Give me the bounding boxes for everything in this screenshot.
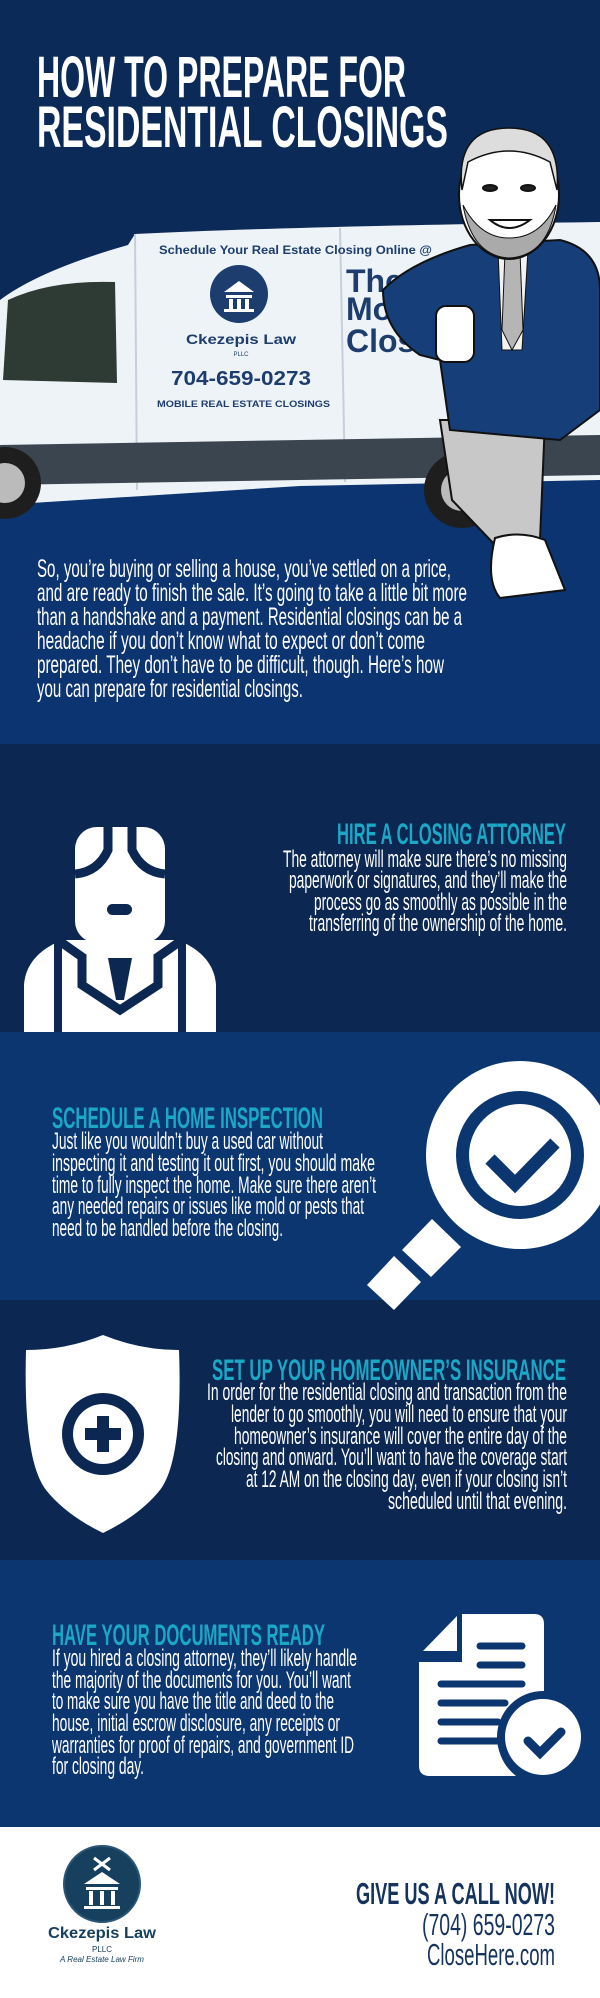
- intro text: [37, 555, 467, 703]
- call to action: [356, 1876, 555, 1972]
- text: inspecting it and testing it out first, you should make: [52, 1150, 375, 1177]
- illustration: cartoon attorney: [383, 128, 600, 598]
- text: [283, 846, 567, 937]
- illustration: van: The: [346, 263, 403, 299]
- logo: A Real Estate Law Firm: [59, 1955, 144, 1964]
- illustration: van: Mobile: [346, 291, 447, 327]
- logo: PLLC: [92, 1945, 112, 1954]
- title: [37, 45, 448, 160]
- icon: shield with plus: [26, 1335, 180, 1533]
- logo: Ckezepis Law: [48, 1925, 157, 1942]
- text: Just like you wouldn’t buy a used car without: [52, 1128, 323, 1155]
- text: time to fully inspect the home. Make sure there aren’t: [52, 1172, 376, 1199]
- text: If you hired a closing attorney, they’ll likely handle: [52, 1645, 357, 1672]
- panel: hero: [0, 0, 600, 744]
- text: to make sure you have the title and deed to the: [52, 1688, 334, 1715]
- text: any needed repairs or issues like mold or pests that: [52, 1193, 364, 1220]
- panel: footer: [0, 1827, 600, 1998]
- logo: [48, 1846, 157, 1964]
- illustration: van: 704-659-0273: [171, 368, 311, 390]
- illustration: van: MOBILE REAL ESTATE CLOSINGS: [157, 399, 330, 409]
- panel: hire a closing attorney: [0, 744, 600, 1033]
- text: the majority of the documents for you. You’ll want: [52, 1667, 351, 1694]
- panel: documents ready: [0, 1560, 600, 1827]
- intro text: you can prepare for residential closings.: [37, 675, 303, 703]
- text: [52, 1128, 376, 1242]
- illustration: van: Closer: [346, 323, 446, 359]
- text: [207, 1379, 567, 1515]
- icon: attorney: [24, 827, 216, 1033]
- text: [51, 1645, 357, 1780]
- illustration: van: PLLC: [233, 352, 249, 358]
- icon: magnifier with check: [367, 1061, 600, 1310]
- panel: homeowner's insurance: [0, 1300, 600, 1560]
- heading: HAVE YOUR DOCUMENTS READY: [52, 1619, 325, 1652]
- panel: schedule a home inspection: [0, 1032, 600, 1300]
- text: warranties for proof of repairs, and government ID: [51, 1732, 354, 1759]
- illustration: van: om: [551, 243, 569, 257]
- heading: SCHEDULE A HOME INSPECTION: [52, 1102, 323, 1135]
- icon: document with check: [419, 1614, 589, 1783]
- illustration: van: Ckezepis Law: [186, 331, 296, 347]
- text: need to be handled before the closing.: [52, 1215, 283, 1242]
- text: house, initial escrow disclosure, any receipts or: [52, 1710, 340, 1737]
- text: for closing day.: [52, 1753, 144, 1780]
- illustration: van: [0, 222, 600, 528]
- illustration: van: Schedule Your Real Estate Closing Online @: [159, 243, 432, 257]
